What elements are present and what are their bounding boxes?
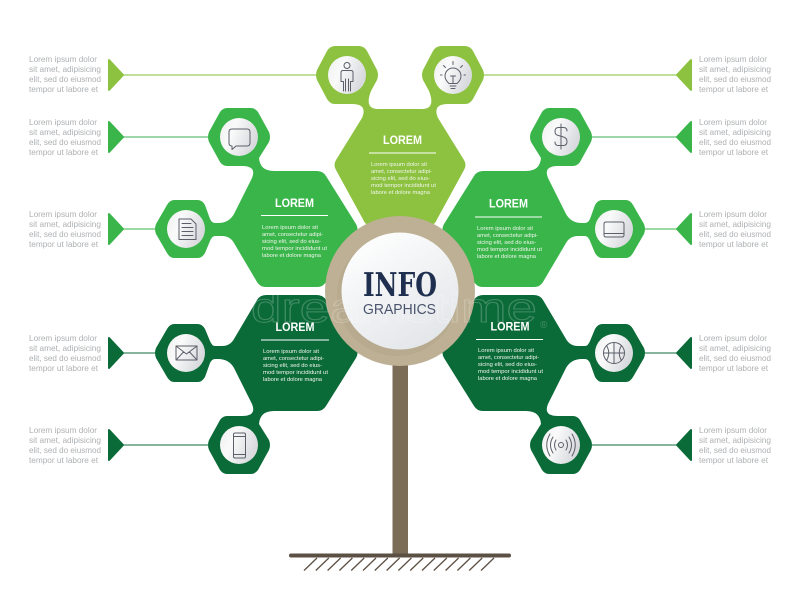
row: top left label (29, 54, 316, 94)
panel: lower left dark green: sicing elit, sed do eius- (263, 363, 322, 369)
row: fourth right label: Lorem ipsum dolor (699, 333, 767, 343)
row: second right label: tempor ut labore et (699, 147, 769, 157)
center title: INFO (363, 265, 437, 304)
row: second right label: elit, sed do eiusmod (699, 137, 771, 147)
row: top left label: Lorem ipsum dolor (29, 54, 97, 64)
panel: upper right green: LOREM (489, 198, 528, 210)
row: top right label: Lorem ipsum dolor (699, 54, 767, 64)
row: third right label: elit, sed do eiusmod (699, 229, 771, 239)
icon: basketball (595, 334, 633, 372)
tree trunk (392, 360, 408, 556)
icon: person (328, 56, 366, 94)
row: top left label: tempor ut labore et (29, 84, 99, 94)
row: fifth right label: elit, sed do eiusmod (699, 445, 771, 455)
row: second left label: Lorem ipsum dolor (29, 117, 97, 127)
panel: upper right green: amet, consectetur adipi- (477, 233, 538, 239)
panel: lower right dark green: sicing elit, sed do eius- (478, 362, 537, 368)
row: third right label: tempor ut labore et (699, 239, 769, 249)
row: second right label: sit amet, adipisicing (699, 127, 771, 137)
row: fourth left label: elit, sed do eiusmod (29, 353, 101, 363)
panel: upper right green: sicing elit, sed do eius- (477, 240, 536, 246)
row: fourth left label: tempor ut labore et (29, 363, 99, 373)
row: fourth right label: elit, sed do eiusmod (699, 353, 771, 363)
row: top left label: elit, sed do eiusmod (29, 74, 101, 84)
icon: envelope (167, 334, 205, 372)
row: third left label: tempor ut labore et (29, 239, 99, 249)
row: third right label: Lorem ipsum dolor (699, 209, 767, 219)
panel: lower left dark green (155, 295, 358, 474)
icon: wireless signal (542, 426, 580, 464)
watermark: dreamstime (251, 284, 537, 331)
icon: smartphone (220, 426, 258, 464)
panel: lower right dark green: labore et dolore magna (478, 376, 538, 382)
panel: lower right dark green: amet, consectetur adipi- (478, 355, 539, 361)
panel: upper right green (442, 108, 645, 287)
row: fourth right label: tempor ut labore et (699, 363, 769, 373)
row: fourth right label: sit amet, adipisicing (699, 343, 771, 353)
icon: light bulb (434, 56, 472, 94)
panel: upper left green: amet, consectetur adipi- (262, 232, 323, 238)
center title (363, 265, 437, 318)
panel: upper left green: sicing elit, sed do eius- (262, 239, 321, 245)
panel: upper right green: labore et dolore magna (477, 254, 537, 260)
row: fifth left label (29, 425, 208, 465)
row: fourth left label: sit amet, adipisicing (29, 343, 101, 353)
panel: top light green: LOREM (383, 135, 422, 147)
row: fifth left label: tempor ut labore et (29, 455, 99, 465)
row: fifth right label (592, 425, 771, 465)
row: second left label: elit, sed do eiusmod (29, 137, 101, 147)
panel: lower right dark green (442, 295, 645, 474)
panel: lower right dark green: Lorem ipsum dolor sit (478, 348, 534, 354)
row: top right label: tempor ut labore et (699, 84, 769, 94)
panel: upper left green: LOREM (275, 198, 314, 210)
watermark: ® (540, 320, 548, 331)
panel: top light green: Lorem ipsum dolor sit (371, 162, 427, 168)
panel: top light green: mod tempor incididunt ut (371, 183, 436, 189)
panel: lower left dark green: amet, consectetur adipi- (263, 356, 324, 362)
row: top right label (484, 54, 771, 94)
icon: speech bubble (220, 118, 258, 156)
panel: top light green: sicing elit, sed do eius- (371, 176, 430, 182)
panel: upper left green (155, 108, 358, 287)
row: second left label: sit amet, adipisicing (29, 127, 101, 137)
row: fifth right label: Lorem ipsum dolor (699, 425, 767, 435)
row: second right label (592, 117, 771, 157)
row: fourth left label (29, 333, 155, 373)
row: third left label: Lorem ipsum dolor (29, 209, 97, 219)
row: third right label: sit amet, adipisicing (699, 219, 771, 229)
row: fifth right label: tempor ut labore et (699, 455, 769, 465)
icon: document (167, 210, 205, 248)
row: fourth right label (645, 333, 771, 373)
center title: GRAPHICS (363, 301, 436, 318)
panel: top light green: labore et dolore magna (371, 190, 431, 196)
row: second left label (29, 117, 208, 157)
panel: lower left dark green: mod tempor incididunt ut (263, 370, 328, 376)
row: third left label: sit amet, adipisicing (29, 219, 101, 229)
row: top left label: sit amet, adipisicing (29, 64, 101, 74)
panel: upper right green: mod tempor incididunt ut (477, 247, 542, 253)
row: third left label (29, 209, 155, 249)
row: fifth right label: sit amet, adipisicing (699, 435, 771, 445)
panel: lower left dark green: LOREM (276, 322, 314, 334)
icon: dollar (542, 118, 580, 156)
row: third left label: elit, sed do eiusmod (29, 229, 101, 239)
panel: lower right dark green: LOREM (490, 322, 530, 334)
panel: upper left green: Lorem ipsum dolor sit (262, 225, 318, 231)
panel: upper right green: Lorem ipsum dolor sit (477, 226, 533, 232)
row: fourth left label: Lorem ipsum dolor (29, 333, 97, 343)
panel: lower right dark green: mod tempor incididunt ut (478, 369, 543, 375)
panel: top light green: amet, consectetur adipi- (371, 169, 432, 175)
row: fifth left label: elit, sed do eiusmod (29, 445, 101, 455)
row: fifth left label: sit amet, adipisicing (29, 435, 101, 445)
row: third right label (645, 209, 771, 249)
row: top right label: elit, sed do eiusmod (699, 74, 771, 84)
row: fifth left label: Lorem ipsum dolor (29, 425, 97, 435)
panel: upper left green: labore et dolore magna (262, 253, 322, 259)
row: top right label: sit amet, adipisicing (699, 64, 771, 74)
panel: lower left dark green: Lorem ipsum dolor sit (263, 349, 319, 355)
icon: laptop (595, 210, 633, 248)
panel: upper left green: mod tempor incididunt ut (262, 246, 327, 252)
panel: top light green (316, 46, 484, 245)
central ring (325, 216, 475, 366)
row: second left label: tempor ut labore et (29, 147, 99, 157)
ground with hatching (291, 556, 509, 570)
row: second right label: Lorem ipsum dolor (699, 117, 767, 127)
panel: lower left dark green: labore et dolore magna (263, 377, 323, 383)
